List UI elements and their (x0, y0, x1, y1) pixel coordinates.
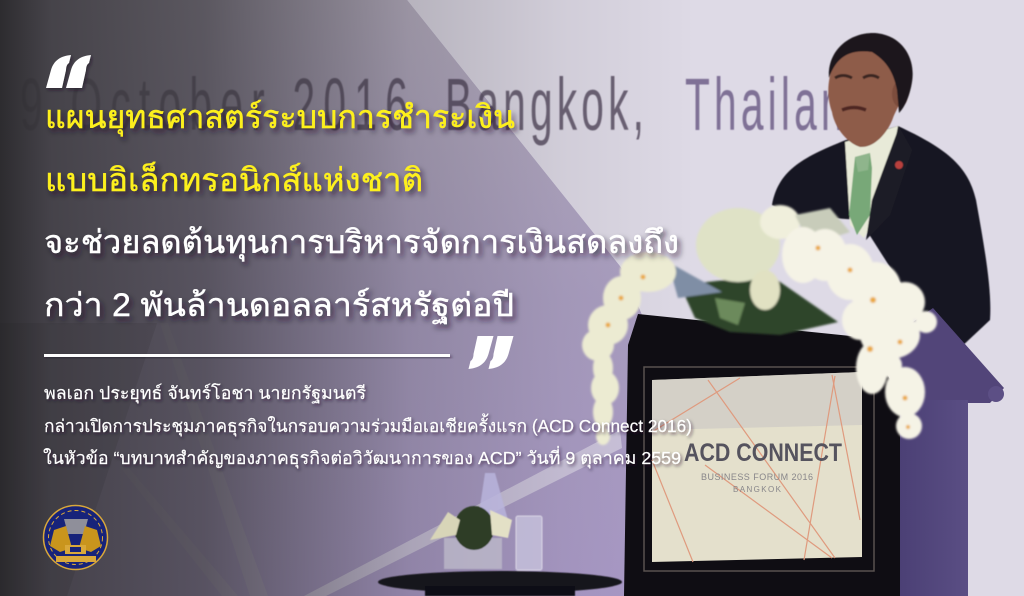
heading: white lines: กว่า 2 พันล้านดอลลาร์สหรัฐต่อปี (44, 287, 514, 325)
photo: side table with flowers, water glass and bottle (378, 473, 622, 596)
backdrop lettering: 9 October 2016 (20, 63, 416, 146)
headline quote (44, 55, 679, 369)
photo: white flower arrangement (582, 205, 937, 445)
icon: government seal (44, 506, 108, 570)
photo: podium with ACD Connect sign (624, 308, 1004, 596)
backdrop lettering (20, 63, 875, 146)
heading: white lines: จะช่วยลดต้นทุนการบริหารจัดการเงินสดลงถึง (44, 224, 679, 262)
attribution text block: พลเอก ประยุทธ์ จันทร์โอชา นายกรัฐมนตรี (44, 383, 366, 404)
sign lettering: ACD CONNECT (684, 439, 842, 467)
backdrop lettering: Bangkok, (445, 63, 648, 146)
heading: highlighted yellow lines (45, 99, 515, 198)
attribution text block (43, 383, 692, 469)
divider line (44, 354, 450, 357)
icon: opening quotation mark (46, 55, 91, 88)
photo: podium with ACD Connect sign: BUSINESS FORUM 2016 (701, 472, 813, 482)
backdrop lettering: Thailand (685, 63, 875, 146)
heading: highlighted yellow lines: แผนยุทธศาสตร์ระบบการชำระเงิน (45, 99, 515, 137)
icon: closing quotation mark (468, 336, 514, 369)
attribution text block: ในหัวข้อ “บทบาทสำคัญของภาคธุรกิจต่อวิวัฒนาการของ ACD” วันที่ 9 ตุลาคม 2559 (43, 446, 681, 469)
attribution text block: กล่าวเปิดการประชุมภาคธุรกิจในกรอบความร่วมมือเอเชียครั้งแรก (ACD Connect 2016) (44, 413, 692, 437)
photo: speaker in dark suit (772, 33, 990, 350)
heading: white lines (44, 224, 679, 325)
photo: podium with ACD Connect sign: BANGKOK (733, 485, 782, 494)
heading: highlighted yellow lines: แบบอิเล็กทรอนิกส์แห่งชาติ (45, 161, 423, 198)
